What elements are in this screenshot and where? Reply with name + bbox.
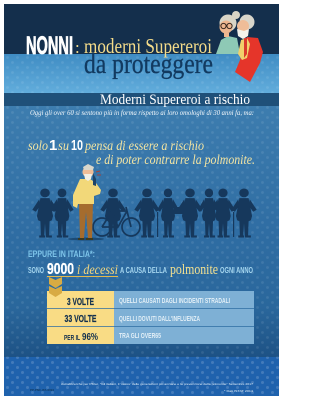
row: 96%: TRA GLI OVER65 xyxy=(119,331,161,340)
row: 3 volte: QUELLI CAUSATI DAGLI INCIDENTI STRADALI xyxy=(119,296,230,305)
statement: solo 1 su 10: solo xyxy=(28,139,48,154)
figure: coughing old man xyxy=(68,164,104,240)
row: 96%: 96% xyxy=(82,331,99,343)
statement: solo 1 su 10: e di poter contrarre la polmonite. xyxy=(96,153,255,168)
row: 33 volte: 33 VOLTE xyxy=(64,313,96,325)
row: 33 volte xyxy=(64,313,200,325)
statement: solo 1 su 10: pensa di essere a rischio xyxy=(84,139,204,154)
title: : xyxy=(75,38,80,57)
footer sources xyxy=(30,382,253,393)
row: 96%: PER IL xyxy=(64,335,81,342)
title: NONNI xyxy=(26,32,73,60)
footer sources: PP-PNC-ITA-0094 xyxy=(30,388,54,392)
row: 3 volte: 3 VOLTE xyxy=(67,296,94,308)
statement: 9000 decessi xyxy=(28,261,253,278)
icon: grandparents superheroes xyxy=(216,11,263,82)
footer sources: AstraRicerche per Pfizer, "Gli italiani, il 'valore' delle generazioni più anziane e la prevenzione della polmonite" Settembre 2017 xyxy=(61,382,253,386)
footer sources: * Dati ISTAT 2014 xyxy=(224,389,253,393)
statement: 9000 decessi: polmonite xyxy=(170,262,218,278)
heading: Moderni Supereroi a rischio: Moderni Supereroi a rischio xyxy=(100,92,250,108)
comparison table xyxy=(47,286,254,344)
statement: solo 1 su 10 xyxy=(28,137,255,168)
statement: solo 1 su 10: su xyxy=(58,139,69,154)
statement: 9000 decessi: i decessi xyxy=(77,263,118,278)
row: 33 volte: QUELLI DOVUTI DALL'INFLUENZA xyxy=(119,314,200,323)
row: 3 volte xyxy=(67,296,230,308)
icon: bicycle xyxy=(93,207,140,236)
row: 96% xyxy=(64,331,161,343)
title xyxy=(26,32,213,80)
intro text: Oggi gli over 60 si sentono più in forma rispetto ai loro omologhi di 30 anni fa, ma: xyxy=(30,109,254,117)
statement: solo 1 su 10: 1 xyxy=(49,137,57,154)
icon: chevron xyxy=(49,277,62,288)
silhouettes crowd xyxy=(32,188,257,238)
statement: 9000 decessi: OGNI ANNO xyxy=(220,266,253,275)
statement: 9000 decessi: 9000 xyxy=(47,261,74,278)
statement: solo 1 su 10: 10 xyxy=(71,137,83,154)
title: da proteggere xyxy=(84,48,213,80)
statement: 9000 decessi: A CAUSA DELLA xyxy=(120,266,167,275)
heading: eppure in Italia: EPPURE IN ITALIA*: xyxy=(28,249,95,259)
title: moderni Supereroi xyxy=(84,34,212,58)
statement: 9000 decessi: SONO xyxy=(28,266,44,275)
